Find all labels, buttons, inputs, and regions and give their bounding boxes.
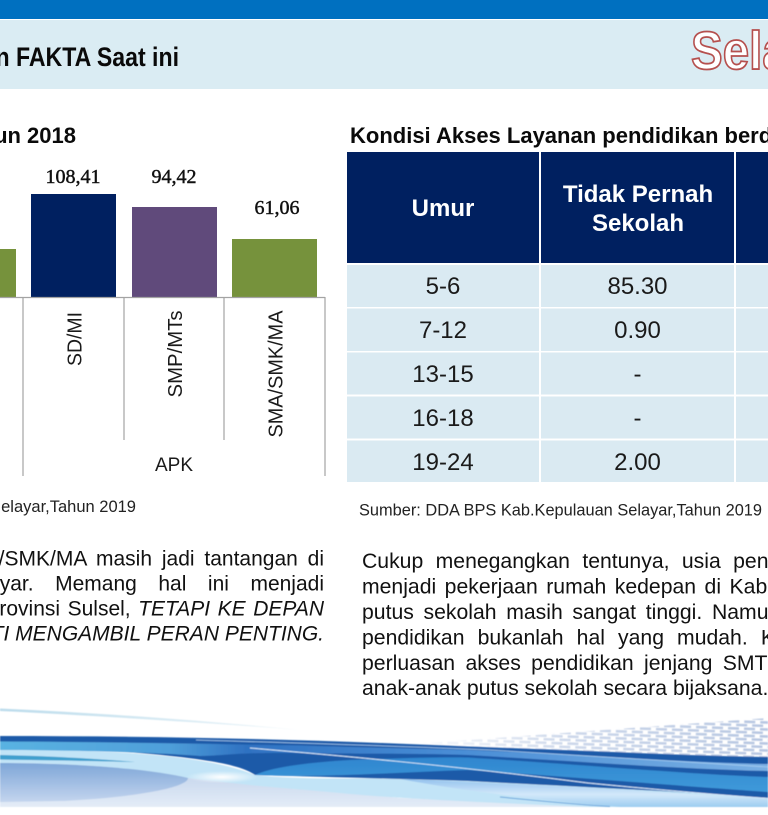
ribbon: bright band	[255, 757, 768, 792]
right paragraph: menjadi pekerjaan rumah kedepan di Kab	[362, 575, 767, 598]
header panel	[0, 20, 768, 89]
table	[347, 152, 768, 482]
left paragraph: TI MENGAMBIL PERAN PENTING.	[0, 622, 324, 646]
table body values: 2.00	[614, 449, 661, 476]
table body values: -	[634, 361, 642, 388]
blue ellipse	[0, 763, 188, 802]
axis group label: APK	[155, 455, 193, 476]
right paragraph: perluasan akses pendidikan jenjang SMT	[362, 652, 768, 675]
right paragraph: pendidikan bukanlah hal yang mudah. K	[362, 626, 768, 649]
value labels	[46, 166, 300, 219]
value labels: 108,41	[46, 166, 100, 188]
left paragraph: /SMK/MA masih jadi tantangan di	[0, 548, 324, 570]
right paragraph: anak-anak putus sekolah secara bijaksana.	[362, 677, 768, 700]
table source: Sumber: DDA BPS Kab.Kepulauan Selayar,Tahun 2019	[359, 502, 762, 520]
right paragraph	[362, 550, 768, 700]
bar: SD/MI	[31, 194, 116, 297]
value labels: 61,06	[254, 197, 300, 219]
table body values	[412, 273, 668, 476]
table body values: -	[634, 405, 642, 432]
table header row: Umur	[412, 195, 474, 222]
axis category labels: SMP/MTs	[164, 310, 187, 398]
bar: partial green	[0, 249, 16, 297]
table header row: Sekolah	[592, 210, 684, 237]
axis category labels: SMA/SMK/MA	[264, 310, 288, 438]
pale cyan band under ribbon	[0, 750, 768, 807]
axis category labels: SD/MI	[64, 312, 86, 366]
ribbon: dark base	[0, 736, 768, 798]
ribbon: thin white lines	[250, 748, 768, 798]
table body values: 0.90	[614, 317, 661, 344]
ribbon: lower edge line	[500, 797, 610, 806]
top blue band	[0, 0, 768, 19]
table header row: Tidak Pernah	[563, 181, 713, 208]
white highlight	[186, 771, 258, 783]
table body values: 85.30	[607, 273, 668, 300]
table body values: 16-18	[412, 405, 474, 432]
right paragraph: putus sekolah masih sangat tinggi. Namu	[362, 601, 768, 624]
decorative wave banner	[0, 708, 768, 807]
table body values: 13-15	[412, 361, 474, 388]
table header row	[347, 152, 768, 263]
chart source: elayar,Tahun 2019	[1, 498, 136, 516]
left paragraph	[0, 548, 325, 646]
table heading: Kondisi Akses Layanan pendidikan berd	[350, 123, 768, 148]
lavender base	[0, 763, 620, 807]
teal wedge	[0, 755, 135, 762]
ribbon: mid band	[0, 742, 768, 771]
bar: SMA/SMK/MA	[232, 239, 317, 297]
bar chart	[0, 166, 325, 476]
table body values: 7-12	[419, 317, 467, 344]
table body values: 19-24	[412, 449, 474, 476]
axis lines	[0, 297, 325, 476]
value labels: 94,42	[152, 166, 196, 188]
axis category labels	[64, 310, 288, 438]
table body values: 5-6	[426, 273, 460, 300]
header title: n FAKTA Saat ini	[0, 44, 179, 72]
upper pale swoosh	[0, 708, 300, 730]
ribbon: lower light band	[400, 779, 768, 807]
table body rows	[347, 265, 768, 482]
right paragraph: Cukup menegangkan tentunya, usia pen	[362, 550, 768, 573]
left paragraph: yar. Memang hal ini menjadi	[0, 572, 324, 596]
bar: SMP/MTs	[132, 207, 217, 297]
dotted perspective grid	[438, 718, 768, 758]
left paragraph: rovinsi Sulsel, TETAPI KE DEPAN	[0, 598, 325, 620]
